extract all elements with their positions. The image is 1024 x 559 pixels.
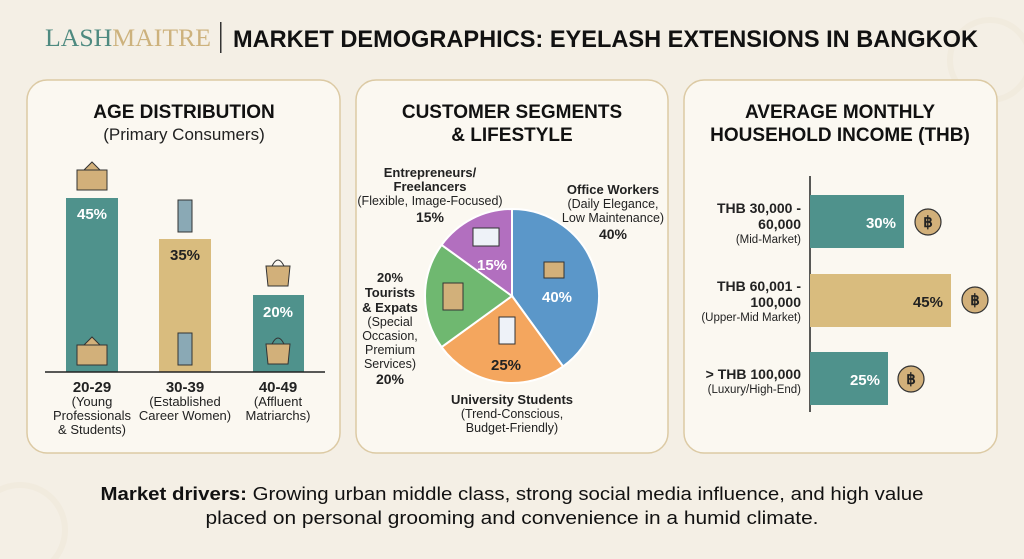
icons: baht coins [898, 209, 988, 392]
pie labels: 20% [377, 270, 403, 285]
pie labels: (Trend-Conscious, [461, 407, 563, 421]
heading: age: AGE DISTRIBUTION [93, 102, 275, 123]
heading: income: HOUSEHOLD INCOME (THB) [710, 125, 970, 146]
pie labels: & Expats [362, 300, 418, 315]
bar chart: age: 40-49 [259, 379, 297, 396]
bar chart: age: Career Women) [139, 408, 231, 423]
pie labels: Freelancers [394, 179, 466, 194]
pie labels: 40% [599, 226, 628, 242]
panel: age distribution [27, 80, 340, 453]
pie chart [425, 209, 599, 383]
heading: segments [402, 102, 622, 146]
pie labels: Occasion, [362, 329, 418, 343]
icons: bars [77, 162, 290, 365]
heading: income [710, 102, 970, 146]
title: MARKET DEMOGRAPHICS: EYELASH EXTENSIONS IN BANGKOK [233, 26, 979, 53]
heading: age [93, 102, 275, 144]
bar chart: age: (Young [72, 394, 112, 409]
panel: household income [684, 80, 997, 453]
bar chart: age: 20% [263, 304, 293, 321]
bar chart: age: 20-29 [73, 379, 111, 396]
market drivers text: Market drivers: Growing urban middle class, strong social media influence, and high value [100, 483, 924, 504]
pie labels: (Daily Elegance, [567, 197, 659, 211]
bar chart: income: 25% [850, 372, 880, 389]
heading: segments: & LIFESTYLE [451, 125, 573, 146]
market drivers text [100, 483, 924, 528]
bar chart: age: Professionals [53, 408, 132, 423]
bar chart: income: (Mid-Market) [736, 234, 801, 246]
bar chart: age: 45% [77, 206, 107, 223]
market drivers text: placed on personal grooming and convenience in a humid climate. [206, 507, 818, 528]
pie labels: University Students [451, 392, 573, 407]
pie labels: Premium [365, 343, 415, 357]
bar chart: age [45, 162, 325, 437]
pie labels: Low Maintenance) [562, 211, 664, 225]
bar chart: income: ฿ [923, 214, 933, 231]
pie labels: Office Workers [567, 182, 659, 197]
pie chart: 40% [542, 289, 572, 306]
bar chart: income: THB 30,000 - [717, 200, 801, 216]
bar chart: income [701, 176, 988, 412]
pie labels: Services) [364, 357, 416, 371]
pie chart: 15% [477, 257, 507, 274]
pie labels: 20% [376, 371, 405, 387]
heading: income: AVERAGE MONTHLY [745, 102, 935, 123]
bar chart: age: Matriarchs) [245, 408, 311, 423]
pie labels: Tourists [365, 285, 415, 300]
pie labels: (Flexible, Image-Focused) [357, 194, 503, 208]
bar chart: income: 45% [913, 294, 943, 311]
bar chart: income: > THB 100,000 [706, 366, 801, 382]
pie labels: (Special [367, 315, 413, 329]
panel: customer segments [356, 80, 668, 453]
bar chart: income: THB 60,001 - [717, 278, 801, 294]
pie labels: 15% [416, 209, 445, 225]
bar chart: income: 60,000 [758, 216, 801, 232]
bar chart: income: 100,000 [750, 294, 801, 310]
bar chart: income: ฿ [970, 292, 980, 309]
bar chart: age: & Students) [58, 422, 126, 437]
pie labels [357, 165, 664, 435]
bar chart: income: (Luxury/High-End) [708, 384, 801, 396]
bar chart: age: (Established [149, 394, 221, 409]
logo: LASHMAITRE [45, 25, 211, 52]
bar chart: age: 35% [170, 247, 200, 264]
pie chart: 25% [491, 357, 521, 374]
heading: segments: CUSTOMER SEGMENTS [402, 102, 622, 123]
pie labels: Entrepreneurs/ [384, 165, 477, 180]
bar chart: income: ฿ [906, 371, 916, 388]
pie labels: Budget-Friendly) [466, 421, 558, 435]
bar chart: age: 30-39 [166, 379, 204, 396]
bar chart: age: (Affluent [254, 394, 302, 409]
bar chart: income: (Upper-Mid Market) [701, 312, 801, 324]
bar chart: income: 30% [866, 215, 896, 232]
heading: age: (Primary Consumers) [103, 125, 265, 144]
